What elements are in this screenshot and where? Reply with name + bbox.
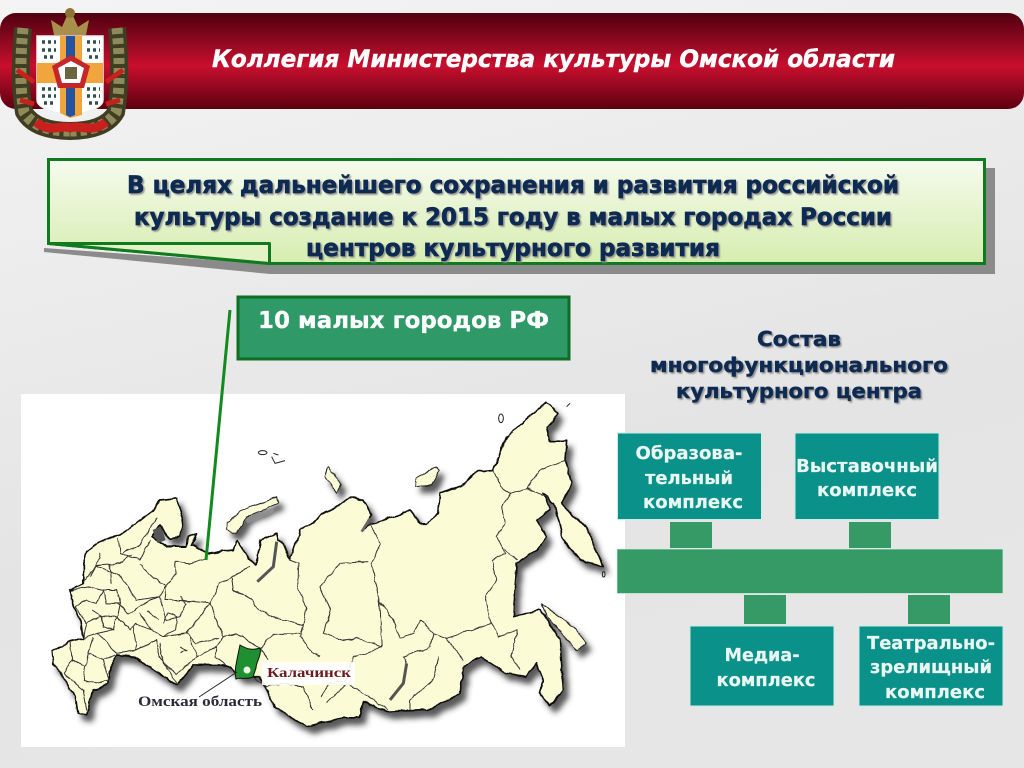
map regions: [52, 402, 605, 727]
box: theatre: Театрально-: [867, 633, 995, 654]
callout: 10 small towns: [238, 297, 569, 359]
panel: map of Russia: [21, 394, 625, 747]
icon: Omsk region coat of arms: [17, 8, 123, 131]
goal text: [127, 171, 899, 262]
heading: centre composition: [650, 327, 948, 403]
heading: centre composition: многофункционального: [650, 353, 948, 377]
connector bar: [617, 549, 1003, 594]
heading: centre composition: Состав: [757, 327, 841, 351]
box: theatre: зрелищный: [870, 657, 992, 678]
label: Kalachinsk: [262, 662, 355, 685]
box: theatre: комплекс: [885, 682, 985, 703]
label: Omsk oblast: Омская область: [138, 694, 262, 710]
label: Omsk oblast: [138, 672, 262, 710]
heading: centre composition: культурного центра: [676, 379, 922, 403]
title: Коллегия Министерства культуры Омской области: [212, 45, 895, 73]
label: Kalachinsk: Калачинск: [267, 666, 352, 681]
header banner: [0, 13, 1024, 109]
box: educational: комплекс: [643, 492, 743, 513]
box: media: [690, 626, 834, 706]
callout: 10 small towns: 10 малых городов РФ: [258, 308, 549, 334]
goal text: В целях дальнейшего сохранения и развития российской: [127, 171, 899, 199]
connectors: [670, 522, 950, 624]
box: media: комплекс: [716, 670, 816, 691]
arrow: leader line to map: [206, 310, 230, 560]
box: media: Медиа-: [724, 645, 800, 666]
box: exhibition: [795, 433, 939, 520]
box: educational: тельный: [645, 468, 733, 489]
goal text: культуры создание к 2015 году в малых городах России: [134, 203, 892, 231]
box: educational: Образова-: [636, 443, 742, 464]
region: Omsk oblast: [235, 645, 260, 679]
diagram: centre structure: [617, 433, 1003, 706]
box: exhibition: комплекс: [817, 480, 917, 501]
goal text: центров культурного развития: [306, 234, 720, 262]
box: educational: [618, 433, 762, 520]
box: exhibition: Выставочный: [796, 456, 938, 477]
box: theatre: [859, 626, 1003, 706]
callout: goal statement: [44, 160, 995, 274]
